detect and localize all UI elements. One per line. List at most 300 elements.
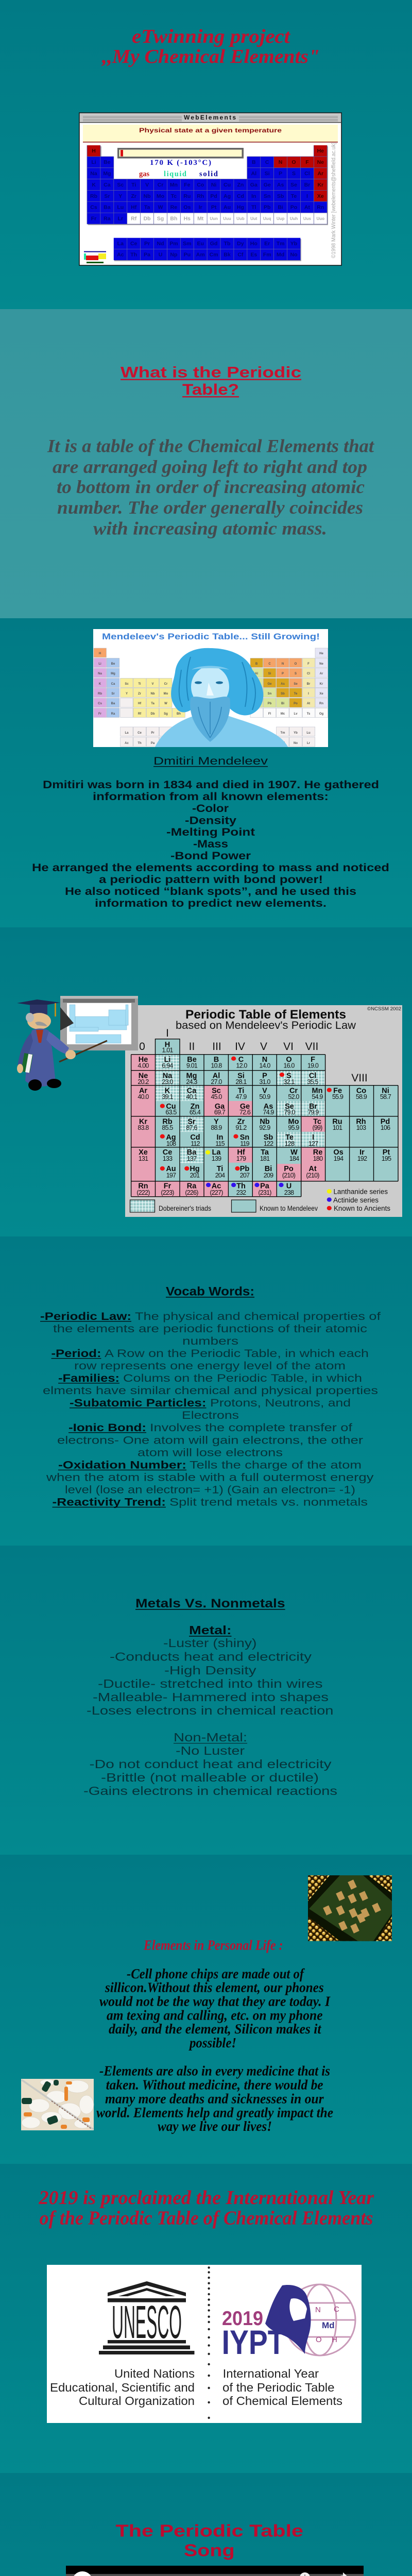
image: periodic table based on Mendeleev's law: 87.6 bbox=[186, 1124, 197, 1131]
image: periodic table based on Mendeleev's law: 27.0 bbox=[211, 1078, 222, 1086]
image: WebElements periodic table window: S bbox=[292, 171, 296, 177]
image: periodic table based on Mendeleev's law: F bbox=[311, 1056, 315, 1064]
heading: 2019 International Year: of the Periodic Table of Chemical Elements bbox=[39, 2208, 373, 2229]
image: WebElements periodic table window: Eu bbox=[197, 241, 204, 247]
image: WebElements periodic table window: Rb bbox=[90, 193, 97, 199]
image: UNESCO and IYPT logos: UNESCO bbox=[112, 2297, 182, 2348]
image: periodic table based on Mendeleev's law: Cl bbox=[309, 1072, 316, 1080]
image: periodic table based on Mendeleev's law: 194 bbox=[334, 1155, 344, 1162]
text block: vocabulary definitions: -Reactivity Trend: bbox=[53, 1497, 166, 1509]
image: Mendeleev portrait over periodic table: S bbox=[295, 672, 297, 675]
image: WebElements periodic table window: Ni bbox=[211, 182, 216, 188]
image: periodic table based on Mendeleev's law: Cr bbox=[289, 1087, 298, 1095]
icon: professor pointing at a periodic table board bbox=[17, 996, 138, 1091]
image: periodic table based on Mendeleev's law: 50.9 bbox=[259, 1093, 270, 1100]
title: ,,My Chemical Elements" bbox=[101, 46, 320, 67]
image: Mendeleev portrait over periodic table: Cr bbox=[164, 683, 168, 686]
image: periodic table based on Mendeleev's law: Ti bbox=[238, 1087, 244, 1095]
image: Mendeleev portrait over periodic table: Md bbox=[281, 742, 285, 745]
image: WebElements periodic table window: Pb bbox=[264, 204, 270, 210]
image: periodic table based on Mendeleev's law: K bbox=[165, 1087, 170, 1095]
image: WebElements periodic table window: Fr bbox=[91, 215, 96, 222]
image: WebElements periodic table window: Pt bbox=[211, 204, 217, 210]
icon: IYPT globe and Mendeleev: C bbox=[334, 2305, 339, 2314]
image: periodic table based on Mendeleev's law: 35.5 bbox=[307, 1078, 318, 1086]
image: periodic table based on Mendeleev's law: 52.0 bbox=[288, 1093, 299, 1100]
image: periodic table based on Mendeleev's law: 209 bbox=[264, 1172, 273, 1179]
image: Mendeleev portrait over periodic table: Pr bbox=[151, 732, 154, 735]
image: periodic table based on Mendeleev's law: 115 bbox=[215, 1140, 225, 1147]
image: periodic table based on Mendeleev's law: 9.01 bbox=[186, 1062, 198, 1070]
text block: definition: to bottom in order of increasing atomic bbox=[57, 477, 365, 497]
image: periodic table based on Mendeleev's law: (210) bbox=[282, 1172, 296, 1179]
image: Mendeleev portrait over periodic table: Li bbox=[98, 663, 101, 666]
image: UNESCO and IYPT logos: International Year bbox=[223, 2367, 319, 2380]
image: periodic table based on Mendeleev's law: 85.5 bbox=[162, 1124, 173, 1131]
image: WebElements periodic table window: Zr bbox=[131, 193, 136, 199]
image: WebElements periodic table window: Pu bbox=[184, 252, 191, 258]
image: WebElements periodic table window: Cf bbox=[237, 252, 244, 258]
image: WebElements periodic table window: Co bbox=[197, 182, 204, 188]
image: periodic table based on Mendeleev's law: based on Mendeleev's Periodic Law bbox=[176, 1020, 356, 1031]
image: Mendeleev portrait over periodic table: Nb bbox=[150, 692, 155, 696]
text block: vocabulary definitions: Colums on the Periodic Table, in which bbox=[123, 1372, 362, 1384]
image: WebElements periodic table window: Ru bbox=[183, 193, 191, 199]
image: WebElements periodic table window: Ar bbox=[317, 171, 323, 177]
image: Mendeleev portrait over periodic table: Lr bbox=[307, 742, 311, 745]
image: Mendeleev portrait over periodic table: Kr bbox=[320, 683, 323, 686]
text block: vocabulary definitions: -Subatomic Particles: bbox=[70, 1397, 206, 1409]
text block: Dmitiri Mendeleev: He arranged the elements according to mass and noticed bbox=[32, 862, 389, 874]
image: periodic table based on Mendeleev's law: VIII bbox=[351, 1072, 368, 1084]
image: periodic table based on Mendeleev's law: 23.0 bbox=[162, 1078, 173, 1086]
image: WebElements periodic table window: La bbox=[117, 241, 124, 247]
image: WebElements periodic table window: At bbox=[304, 204, 310, 210]
image: Mendeleev portrait over periodic table: V bbox=[151, 683, 154, 686]
image: periodic table based on Mendeleev's law: Kr bbox=[139, 1118, 147, 1126]
image: periodic table based on Mendeleev's law: 79.9 bbox=[307, 1109, 319, 1116]
image: WebElements periodic table window: Si bbox=[265, 171, 270, 177]
image: WebElements periodic table window: Be bbox=[104, 159, 111, 165]
image: Mendeleev portrait over periodic table: W bbox=[164, 702, 167, 705]
image: periodic table based on Mendeleev's law: 128 bbox=[285, 1140, 295, 1147]
image: periodic table based on Mendeleev's law: VII bbox=[305, 1041, 318, 1053]
image: periodic table based on Mendeleev's law: 238 bbox=[284, 1189, 294, 1196]
text block: vocabulary definitions: Split trend metals vs. nonmetals bbox=[169, 1497, 368, 1509]
image: Mendeleev portrait over periodic table: Y bbox=[126, 692, 128, 696]
image: WebElements periodic table window: C bbox=[265, 159, 269, 165]
image: periodic table based on Mendeleev's law: Be bbox=[187, 1056, 197, 1064]
image: Mendeleev portrait over periodic table: At bbox=[307, 702, 310, 705]
image: WebElements periodic table window: I bbox=[306, 193, 308, 199]
image: periodic table based on Mendeleev's law: P bbox=[262, 1072, 267, 1080]
image: periodic table based on Mendeleev's law: U bbox=[286, 1182, 291, 1191]
image: WebElements periodic table window: W bbox=[158, 204, 163, 210]
icon: IYPT globe and Mendeleev: O bbox=[316, 2335, 322, 2344]
image: periodic table based on Mendeleev's law: Se bbox=[285, 1103, 294, 1111]
image: WebElements periodic table window: Xe bbox=[317, 193, 324, 199]
image: WebElements periodic table window: Ra bbox=[104, 215, 111, 222]
image: periodic table based on Mendeleev's law: 92.9 bbox=[259, 1124, 270, 1131]
image: Mendeleev portrait over periodic table: Mendeleev's Periodic Table... Still Growing! bbox=[102, 632, 320, 641]
image: periodic table based on Mendeleev's law: Fr bbox=[164, 1182, 171, 1191]
image: periodic table based on Mendeleev's law: Pt bbox=[383, 1148, 390, 1157]
image: WebElements periodic table window: Re bbox=[170, 204, 177, 210]
text block: metal properties: -Loses electrons in chemical reaction bbox=[87, 1704, 334, 1717]
image: WebElements periodic table window: Uuq bbox=[263, 216, 271, 221]
image: WebElements periodic table window: Rf bbox=[131, 215, 137, 222]
image: WebElements periodic table window: Sn bbox=[264, 193, 270, 199]
heading: elements in personal life: Elements in Personal Life : bbox=[143, 1938, 283, 1953]
image: WebElements periodic table window: Bk bbox=[224, 252, 231, 258]
image: WebElements periodic table window: O bbox=[291, 159, 296, 165]
image: Mendeleev portrait over periodic table: K bbox=[99, 683, 101, 686]
image: periodic table based on Mendeleev's law: (210) bbox=[306, 1172, 319, 1179]
image: periodic table based on Mendeleev's law: Hf bbox=[237, 1148, 245, 1157]
image: Mendeleev portrait over periodic table: Ra bbox=[111, 713, 115, 716]
image: Mendeleev portrait over periodic table: Xe bbox=[319, 692, 323, 696]
image: UNESCO and IYPT logos: of Chemical Elements bbox=[222, 2394, 342, 2408]
image: WebElements periodic table window: Pa bbox=[144, 252, 150, 258]
image: Mendeleev portrait over periodic table: Pb bbox=[268, 702, 272, 705]
text block: vocabulary definitions: -Oxidation Number: bbox=[58, 1460, 186, 1471]
text block: silicon in cell phones: sillicon.Without this element, our phones bbox=[105, 1980, 324, 1995]
image: periodic table based on Mendeleev's law: 197 bbox=[166, 1172, 176, 1179]
image: periodic table based on Mendeleev's law: Zn bbox=[191, 1103, 199, 1111]
image: periodic table based on Mendeleev's law: 201 bbox=[190, 1172, 200, 1179]
image: periodic table based on Mendeleev's law: Co bbox=[356, 1087, 366, 1095]
image: WebElements periodic table window: Tl bbox=[251, 204, 256, 210]
image: WebElements periodic table window: Db bbox=[144, 215, 151, 222]
image: WebElements periodic table window: solid bbox=[199, 170, 218, 178]
image: periodic table based on Mendeleev's law: (231) bbox=[258, 1189, 271, 1196]
text block: metal properties: -Ductile- stretched into thin wires bbox=[98, 1677, 322, 1690]
image: Mendeleev portrait over periodic table: Ce bbox=[138, 732, 142, 735]
image: periodic table based on Mendeleev's law: Ac bbox=[212, 1182, 221, 1191]
text block: Dmitiri Mendeleev: -Mass bbox=[193, 838, 228, 850]
image: WebElements periodic table window: Uub bbox=[236, 216, 245, 221]
text block: elements in medicine: way we live our lives! bbox=[158, 2119, 272, 2134]
image: periodic table based on Mendeleev's law: (222) bbox=[136, 1189, 150, 1196]
image: WebElements periodic table window: liquid bbox=[164, 170, 186, 178]
text block: vocabulary definitions: Tells the charge of the atom bbox=[190, 1460, 362, 1471]
image: WebElements periodic table window: Am bbox=[196, 252, 205, 258]
image: periodic table based on Mendeleev's law: 207 bbox=[240, 1172, 250, 1179]
image: WebElements periodic table window: Mo bbox=[157, 193, 164, 199]
image: periodic table based on Mendeleev's law: Bi bbox=[265, 1165, 272, 1173]
image: periodic table based on Mendeleev's law: 204 bbox=[215, 1172, 225, 1179]
image: Mendeleev portrait over periodic table: Sg bbox=[164, 713, 168, 716]
text block: elements in medicine: taken. Without medicine, there would be bbox=[106, 2077, 323, 2093]
image: periodic table based on Mendeleev's law: 54.9 bbox=[312, 1093, 323, 1100]
image: periodic table based on Mendeleev's law: 127 bbox=[308, 1140, 318, 1147]
image: WebElements periodic table window: Br bbox=[304, 182, 310, 188]
image: periodic table based on Mendeleev's law: 4.00 bbox=[138, 1062, 149, 1070]
image: WebElements periodic table window: He bbox=[317, 148, 324, 154]
image: WebElements periodic table window: Pd bbox=[210, 193, 217, 199]
image: WebElements periodic table window: Ge bbox=[264, 182, 271, 188]
image: WebElements periodic table window: Hf bbox=[131, 204, 137, 210]
image: periodic table based on Mendeleev's law: 119 bbox=[240, 1140, 250, 1147]
image: Mendeleev portrait over periodic table: C bbox=[268, 663, 271, 666]
image: Mendeleev portrait over periodic table: Si bbox=[268, 672, 271, 675]
section background: what is the periodic table bbox=[0, 309, 412, 618]
image: WebElements periodic table window: K bbox=[92, 182, 96, 188]
text block: Dmitiri Mendeleev bbox=[32, 755, 389, 909]
image: Mendeleev portrait over periodic table: Al bbox=[255, 672, 258, 675]
image: Mendeleev portrait over periodic table: No bbox=[294, 742, 298, 745]
image: periodic table based on Mendeleev's law: Ti bbox=[217, 1165, 223, 1173]
image: periodic table based on Mendeleev's law: In bbox=[217, 1133, 223, 1142]
text block: Dmitiri Mendeleev: -Color bbox=[192, 803, 229, 815]
image: periodic table based on Mendeleev's law: 19.0 bbox=[307, 1062, 319, 1070]
image: periodic table based on Mendeleev's law: 72.6 bbox=[239, 1109, 251, 1116]
image: WebElements periodic table window: Uuo bbox=[317, 216, 324, 221]
image: UNESCO and IYPT logos: IYPT bbox=[222, 2323, 285, 2361]
text block: vocabulary definitions: row represents one energy level of the atom bbox=[74, 1360, 346, 1372]
image: WebElements periodic table window: N bbox=[279, 159, 282, 165]
image: periodic table based on Mendeleev's law bbox=[125, 1005, 402, 1217]
text block: vocabulary definitions: elments have similar chemical and physical properties bbox=[43, 1385, 378, 1397]
image: periodic table based on Mendeleev's law: Known to Mendeleev bbox=[260, 1205, 318, 1212]
image: WebElements periodic table window: Po bbox=[290, 204, 297, 210]
image: periodic table based on Mendeleev's law: 69.7 bbox=[214, 1109, 226, 1116]
image: Mendeleev portrait over periodic table: Lv bbox=[294, 713, 298, 716]
image: periodic table based on Mendeleev's law: 10.8 bbox=[211, 1062, 222, 1070]
image: periodic table based on Mendeleev's law: 79.0 bbox=[284, 1109, 295, 1116]
image: periodic table based on Mendeleev's law: Y bbox=[214, 1118, 219, 1126]
image: UNESCO and IYPT logos: Educational, Scientific and bbox=[50, 2381, 195, 2394]
image: periodic table based on Mendeleev's law: 40.1 bbox=[186, 1093, 197, 1100]
image: periodic table based on Mendeleev's law: 58.7 bbox=[380, 1093, 391, 1100]
image: WebElements periodic table window: Md bbox=[277, 252, 284, 258]
image: UNESCO and IYPT logos bbox=[47, 2265, 362, 2423]
image: WebElements periodic table window: Ca bbox=[104, 182, 111, 188]
image: periodic table based on Mendeleev's law: Br bbox=[309, 1103, 317, 1111]
image: Mendeleev portrait over periodic table: N bbox=[282, 663, 284, 666]
image: periodic table based on Mendeleev's law: 137 bbox=[187, 1155, 197, 1162]
image: WebElements periodic table window: Se bbox=[290, 182, 297, 188]
image: periodic table based on Mendeleev's law: Mg bbox=[186, 1072, 197, 1080]
heading: what is the periodic table bbox=[121, 364, 301, 398]
image: periodic table based on Mendeleev's law: Rn bbox=[138, 1182, 148, 1191]
text block: Dmitiri Mendeleev: He also noticed “blank spots”, and he used this bbox=[65, 886, 356, 897]
image: Mendeleev portrait over periodic table: Db bbox=[150, 713, 155, 716]
image: WebElements periodic table window: Ho bbox=[250, 241, 258, 247]
image: Mendeleev portrait over periodic table: Ac bbox=[125, 742, 129, 745]
text block: vocabulary definitions: Involves the complete transfer of bbox=[150, 1422, 352, 1434]
image: periodic table based on Mendeleev's law: Sc bbox=[212, 1087, 221, 1095]
image: WebElements periodic table window: Cl bbox=[304, 171, 310, 177]
image: periodic table based on Mendeleev's law: N bbox=[262, 1056, 267, 1064]
image: Mendeleev portrait over periodic table: Rb bbox=[98, 692, 102, 696]
text block: vocabulary definitions: numbers bbox=[182, 1335, 238, 1347]
image: periodic table based on Mendeleev's law: 63.5 bbox=[165, 1109, 177, 1116]
text block: vocabulary definitions: the elements are periodic functions of their atomic bbox=[53, 1323, 367, 1335]
image: periodic table based on Mendeleev's law: 195 bbox=[382, 1155, 391, 1162]
image: Mendeleev portrait over periodic table: Be bbox=[111, 663, 115, 666]
image: periodic table based on Mendeleev's law: Xe bbox=[139, 1148, 148, 1157]
image: Mendeleev portrait over periodic table: Te bbox=[294, 692, 298, 696]
image: WebElements periodic table window: Rn bbox=[317, 204, 324, 210]
image: WebElements periodic table window: Uup bbox=[277, 216, 284, 221]
image: periodic table based on Mendeleev's law: Actinide series bbox=[333, 1196, 379, 1204]
text block: silicon in cell phones: possible! bbox=[188, 2035, 236, 2050]
image: Mendeleev portrait over periodic table: Zr bbox=[138, 692, 142, 696]
text block: Dmitiri Mendeleev: information from all known elements: bbox=[93, 791, 329, 803]
text block: metal properties: Metal: bbox=[189, 1623, 232, 1637]
image: periodic table based on Mendeleev's law: 179 bbox=[236, 1155, 246, 1162]
image: WebElements periodic table window: Hg bbox=[237, 204, 244, 210]
image: Mendeleev portrait over periodic table: Rn bbox=[319, 702, 323, 705]
text block: metal properties: -Luster (shiny) bbox=[163, 1636, 256, 1650]
image: UNESCO and IYPT logos: of the Periodic Table bbox=[222, 2381, 335, 2394]
image: WebElements periodic table window: Es bbox=[250, 252, 257, 258]
image: periodic table based on Mendeleev's law: 47.9 bbox=[235, 1093, 247, 1100]
image: WebElements periodic table window: As bbox=[277, 182, 284, 188]
image: WebElements periodic table window: Physical state at a given temperature bbox=[139, 127, 282, 134]
image: periodic table based on Mendeleev's law: 65.4 bbox=[190, 1109, 201, 1116]
image: periodic table based on Mendeleev's law: 45.0 bbox=[211, 1093, 222, 1100]
image: WebElements periodic table window: gas bbox=[139, 170, 149, 178]
heading: 2019 International Year: 2019 is proclaimed the International Year bbox=[39, 2187, 374, 2209]
icon: IYPT globe and Mendeleev bbox=[265, 2284, 355, 2355]
image: Mendeleev portrait over periodic table: Tm bbox=[280, 732, 285, 735]
image: WebElements periodic table window: Mt bbox=[197, 215, 204, 222]
image: Mendeleev portrait over periodic table: Ca bbox=[111, 683, 115, 686]
section background: vocab bbox=[0, 1236, 412, 1546]
image: periodic table based on Mendeleev's law: 74.9 bbox=[263, 1109, 274, 1116]
image: periodic table based on Mendeleev's law: Periodic Table of Elements bbox=[185, 1008, 346, 1022]
image: WebElements periodic table window: V bbox=[145, 182, 149, 188]
image: periodic table based on Mendeleev's law: Zr bbox=[237, 1118, 245, 1126]
image: Mendeleev portrait over periodic table: Pa bbox=[151, 742, 155, 745]
image: periodic table based on Mendeleev's law: Ru bbox=[332, 1118, 342, 1126]
image: Mendeleev portrait over periodic table: Mc bbox=[281, 713, 285, 716]
image: WebElements periodic table window: Cu bbox=[224, 182, 231, 188]
image: WebElements periodic table window: Pr bbox=[144, 241, 150, 247]
image: periodic table based on Mendeleev's law: At bbox=[308, 1165, 317, 1173]
image: WebElements periodic table window: Cd bbox=[237, 193, 244, 199]
image: WebElements periodic table window: Y bbox=[118, 193, 122, 199]
image: periodic table based on Mendeleev's law: 101 bbox=[333, 1124, 342, 1131]
image: WebElements periodic table window: Mn bbox=[170, 182, 178, 188]
image: WebElements periodic table window: Te bbox=[291, 193, 297, 199]
text block: elements in medicine: world. Elements help and greatly impact the bbox=[96, 2105, 333, 2121]
image: periodic table based on Mendeleev's law: Tc bbox=[313, 1118, 321, 1126]
image: WebElements periodic table window: Np bbox=[170, 252, 177, 258]
image: WebElements periodic table window: Ag bbox=[224, 193, 231, 199]
image: periodic table based on Mendeleev's law: (223) bbox=[161, 1189, 174, 1196]
text block: non-metal properties: -Do not conduct heat and electricity bbox=[90, 1757, 332, 1771]
text block: vocabulary definitions: -Families: bbox=[58, 1372, 119, 1384]
image: WebElements periodic table window: 170 K (-103°C) bbox=[150, 159, 211, 167]
image: WebElements periodic table window: Al bbox=[251, 171, 256, 177]
image: WebElements periodic table window: In bbox=[251, 193, 256, 199]
image: WebElements periodic table window: WebElements bbox=[184, 114, 236, 121]
image: periodic table based on Mendeleev's law: 184 bbox=[289, 1155, 299, 1162]
text block: non-metal properties: -No Luster bbox=[176, 1744, 245, 1757]
image: WebElements periodic table window: Lu bbox=[117, 204, 124, 210]
image: WebElements periodic table window: Bi bbox=[278, 204, 283, 210]
image: WebElements periodic table window: Pm bbox=[169, 241, 178, 247]
image: computer chip bbox=[308, 1875, 392, 1941]
image: WebElements periodic table window: Uuh bbox=[290, 216, 298, 221]
image: WebElements periodic table window: Ne bbox=[317, 159, 324, 165]
image: Mendeleev portrait over periodic table: Br bbox=[307, 683, 311, 686]
text block: definition: It is a table of the Chemical Elements that bbox=[47, 436, 374, 456]
image: periodic table based on Mendeleev's law: 131 bbox=[139, 1155, 148, 1162]
image: periodic table based on Mendeleev's law: 12.0 bbox=[236, 1062, 247, 1070]
image: periodic table based on Mendeleev's law: 139 bbox=[212, 1155, 221, 1162]
text block: vocabulary definitions: A Row on the Periodic Table, in which each bbox=[105, 1348, 369, 1360]
image: periodic table based on Mendeleev's law: Mo bbox=[288, 1118, 299, 1126]
image: periodic table based on Mendeleev's law: Pd bbox=[381, 1118, 390, 1126]
image: Mendeleev portrait over periodic table bbox=[93, 629, 328, 747]
image: WebElements periodic table window: Tb bbox=[224, 241, 230, 247]
image: periodic table based on Mendeleev's law: I bbox=[166, 1027, 169, 1039]
image: periodic table based on Mendeleev's law: Rb bbox=[162, 1118, 173, 1126]
image: WebElements periodic table window: Ti bbox=[131, 182, 136, 188]
text block: vocabulary definitions: Protons, Neutrons, and bbox=[210, 1397, 351, 1409]
text block: definition bbox=[47, 436, 374, 539]
image: periodic table based on Mendeleev's law: Ir bbox=[359, 1148, 365, 1157]
image: periodic table based on Mendeleev's law: IV bbox=[235, 1041, 245, 1053]
image: periodic table based on Mendeleev's law: Au bbox=[166, 1165, 176, 1173]
text block: vocabulary definitions: atom will lose electrons bbox=[138, 1447, 283, 1459]
image: periodic table based on Mendeleev's law: 0 bbox=[139, 1041, 145, 1053]
image: WebElements periodic table window: Uus bbox=[303, 216, 312, 221]
section background: personal life bbox=[0, 1855, 412, 2164]
icon: UNESCO temple bbox=[99, 2281, 195, 2354]
image: periodic table based on Mendeleev's law: 55.9 bbox=[332, 1093, 344, 1100]
image: periodic table based on Mendeleev's law: 1.01 bbox=[162, 1047, 173, 1054]
image: WebElements periodic table window: F bbox=[305, 159, 309, 165]
image: periodic table based on Mendeleev's law: Sn bbox=[240, 1133, 249, 1142]
image: Mendeleev portrait over periodic table: Og bbox=[319, 713, 323, 716]
image: periodic table based on Mendeleev's law: Re bbox=[313, 1148, 322, 1157]
image: periodic table based on Mendeleev's law: 31.0 bbox=[259, 1078, 270, 1086]
image: periodic table based on Mendeleev's law: 103 bbox=[356, 1124, 366, 1131]
image: periodic table based on Mendeleev's law: Pa bbox=[260, 1182, 270, 1191]
image: Mendeleev portrait over periodic table: Po bbox=[294, 702, 298, 705]
image: periodic table based on Mendeleev's law: Si bbox=[237, 1072, 245, 1080]
image: periodic table based on Mendeleev's law: 83.8 bbox=[138, 1124, 149, 1131]
image: periodic table based on Mendeleev's law: Ag bbox=[166, 1133, 176, 1142]
image: WebElements periodic table window bbox=[79, 113, 341, 265]
image: WebElements periodic table window: Ta bbox=[144, 204, 150, 210]
text block: silicon in cell phones bbox=[99, 1966, 331, 2050]
heading: 2019 International Year bbox=[39, 2187, 374, 2229]
image: WebElements periodic table window: Fm bbox=[263, 252, 271, 258]
image: Mendeleev portrait over periodic table: P bbox=[282, 672, 284, 675]
image: periodic table based on Mendeleev's law: Hg bbox=[190, 1165, 200, 1173]
image: WebElements periodic table window: Uuu bbox=[223, 216, 231, 221]
text block: elements in medicine: many more deaths and sicknesses in our bbox=[105, 2091, 324, 2107]
image: periodic table based on Mendeleev's law: Sr bbox=[187, 1118, 196, 1126]
image: periodic table based on Mendeleev's law: Ar bbox=[139, 1087, 147, 1095]
image: periodic table based on Mendeleev's law: 24.3 bbox=[186, 1078, 197, 1086]
image: periodic table based on Mendeleev's law: Po bbox=[284, 1165, 294, 1173]
image: periodic table based on Mendeleev's law: 14.0 bbox=[259, 1062, 270, 1070]
image: periodic table based on Mendeleev's law: 106 bbox=[381, 1124, 390, 1131]
image: WebElements periodic table window: Sc bbox=[117, 182, 124, 188]
image: Mendeleev portrait over periodic table: Cs bbox=[98, 702, 102, 705]
section background: song bbox=[0, 2473, 412, 2576]
text block: Dmitiri Mendeleev: a periodic pattern with bond power! bbox=[99, 874, 323, 886]
image: UNESCO and IYPT logos: Cultural Organization bbox=[79, 2394, 195, 2408]
image: periodic table based on Mendeleev's law: 58.9 bbox=[356, 1093, 367, 1100]
